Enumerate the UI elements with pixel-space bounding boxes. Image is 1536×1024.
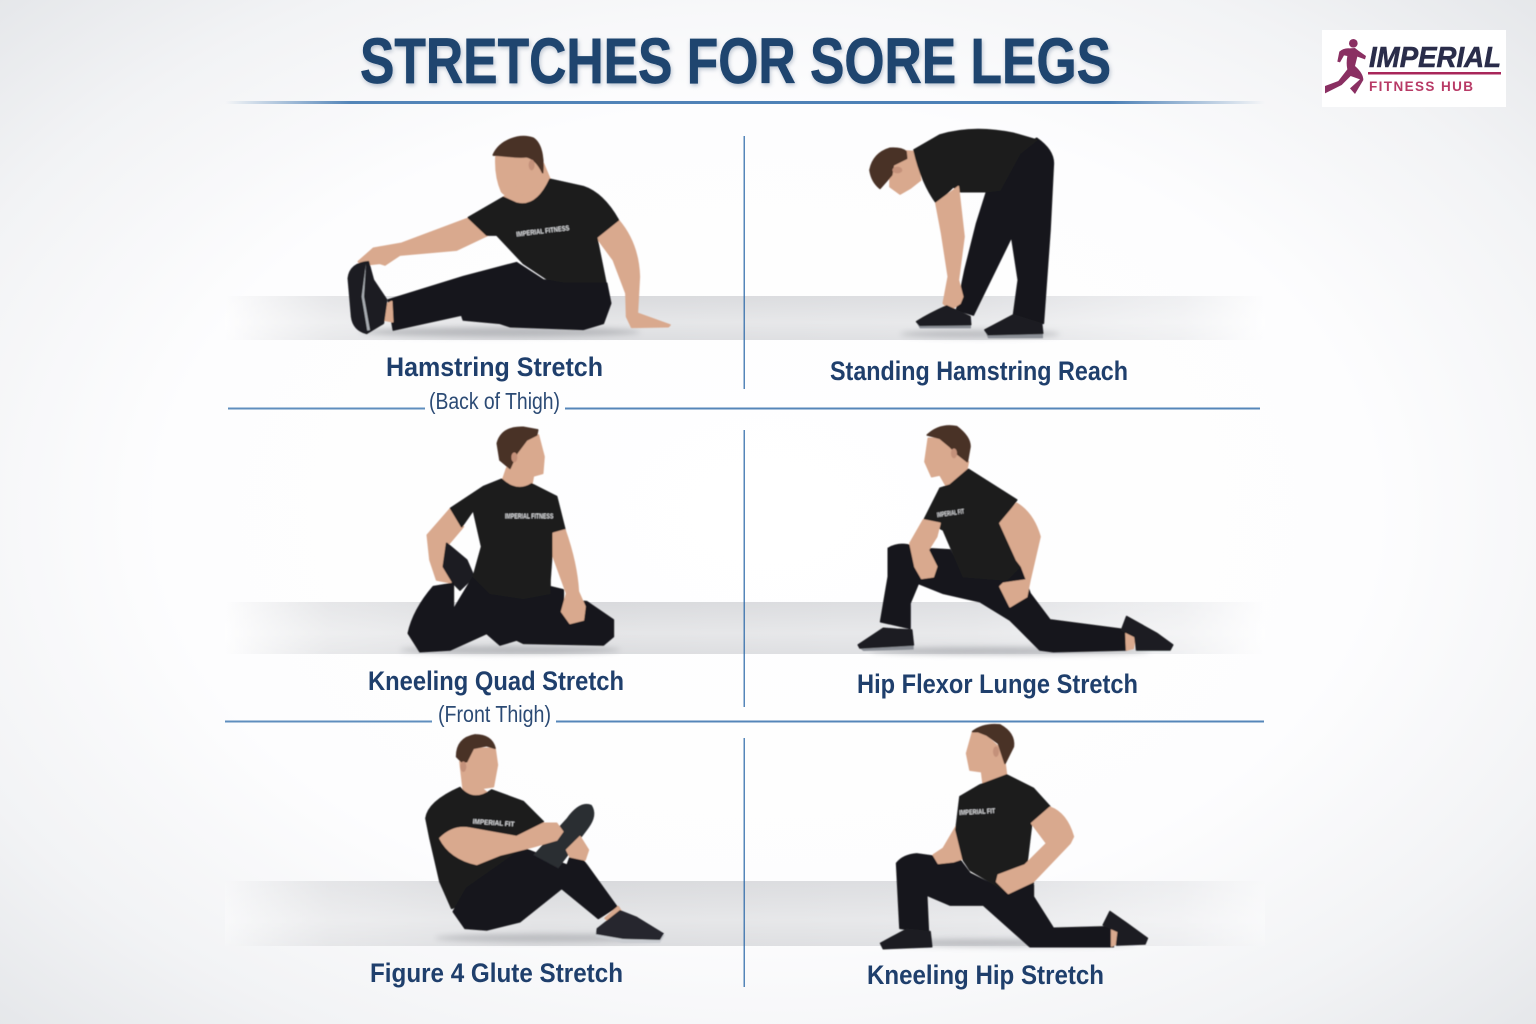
heading: hip flexor lunge stretch: Hip Flexor Lunge Stretch <box>857 669 1138 699</box>
heading: figure 4 glute stretch: Figure 4 Glute Stretch <box>370 958 623 988</box>
panel: hamstring stretch <box>348 137 670 414</box>
figure: seated hamstring stretch: IMPERIAL FITNESS <box>516 225 570 239</box>
floor bands <box>225 296 1265 946</box>
grid dividers <box>225 136 1264 987</box>
figure: low lunge: IMPERIAL FIT <box>937 509 965 519</box>
heading: kneeling quad stretch: Kneeling Quad Stretch <box>368 666 624 696</box>
figure: kneeling quad stretch <box>408 427 613 652</box>
panel: kneeling hip stretch <box>867 725 1147 990</box>
logo: IMPERIAL <box>1369 42 1501 74</box>
figure: kneeling lunge with hand on hip: IMPERIAL FIT <box>959 808 996 817</box>
heading: hamstring stretch: Hamstring Stretch <box>386 352 603 382</box>
panel: standing hamstring reach <box>830 130 1128 386</box>
heading: kneeling hip stretch: Kneeling Hip Stretch <box>867 960 1104 990</box>
subheading: front thigh: (Front Thigh) <box>438 701 551 727</box>
figure: kneeling quad stretch: IMPERIAL FITNESS <box>505 513 554 520</box>
subheading: back of thigh: (Back of Thigh) <box>429 388 560 414</box>
figure: kneeling lunge with hand on hip <box>881 725 1147 949</box>
logo: FITNESS HUB <box>1369 79 1473 94</box>
panel: hip flexor lunge stretch <box>857 426 1173 699</box>
logo <box>1322 30 1506 107</box>
title: STRETCHES FOR SORE LEGS <box>360 25 1111 97</box>
figure: seated hamstring stretch <box>348 137 670 333</box>
heading: standing hamstring reach: Standing Hamstring Reach <box>830 356 1128 386</box>
panel: kneeling quad stretch <box>368 427 624 727</box>
figure: standing forward bend <box>870 130 1053 338</box>
panel: figure 4 glute stretch <box>370 735 665 988</box>
figure: seated figure 4: IMPERIAL FIT <box>473 819 515 829</box>
figure: seated figure 4 <box>426 735 665 943</box>
icon: runner <box>1325 39 1366 94</box>
figure: low lunge <box>858 426 1173 652</box>
